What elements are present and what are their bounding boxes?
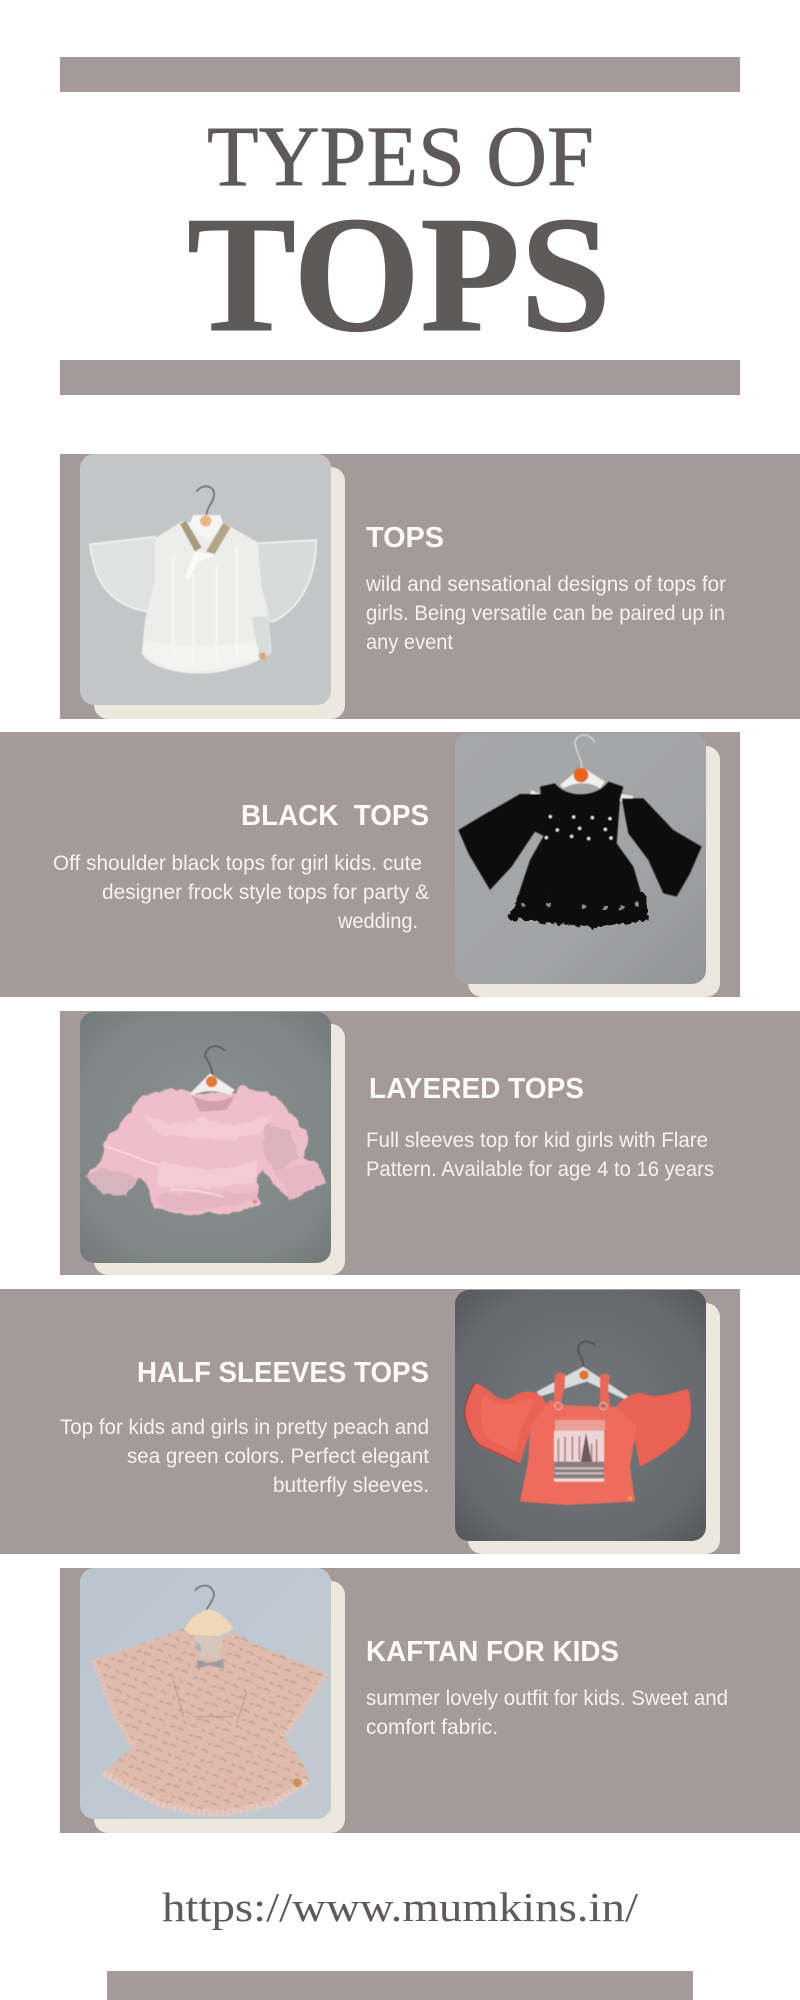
description bbox=[53, 852, 429, 933]
description: Top for kids and girls in pretty peach and bbox=[60, 1416, 429, 1439]
panel: kaftan for kids bbox=[60, 1568, 800, 1833]
header bbox=[60, 57, 740, 395]
photo: floral kaftan bbox=[80, 1568, 331, 1819]
card backing bbox=[94, 1581, 345, 1833]
heading: TOPS bbox=[366, 522, 444, 554]
panel: tops bbox=[60, 454, 800, 719]
description bbox=[366, 1687, 728, 1739]
panel: half sleeves tops bbox=[0, 1289, 740, 1554]
description: butterfly sleeves. bbox=[273, 1474, 429, 1497]
description: Pattern. Available for age 4 to 16 years bbox=[366, 1158, 714, 1181]
lace hem bbox=[509, 893, 648, 929]
heading: KAFTAN FOR KIDS bbox=[366, 1636, 619, 1668]
description: designer frock style tops for party & bbox=[102, 881, 429, 904]
top header bar bbox=[60, 57, 740, 92]
description: sea green colors. Perfect elegant bbox=[127, 1445, 429, 1468]
footer bar bbox=[107, 1971, 693, 2000]
description: comfort fabric. bbox=[366, 1716, 498, 1739]
description: Full sleeves top for kid girls with Flare bbox=[366, 1129, 708, 1152]
description bbox=[366, 1129, 714, 1181]
card backing bbox=[94, 467, 345, 719]
card backing bbox=[468, 1303, 720, 1554]
description: girls. Being versatile can be paired up in bbox=[366, 602, 725, 625]
title line: types of: TYPES OF bbox=[207, 108, 594, 204]
description: wild and sensational designs of tops for bbox=[365, 573, 726, 596]
heading: BLACK TOPS bbox=[241, 800, 429, 832]
heading: LAYERED TOPS bbox=[369, 1073, 584, 1105]
card backing bbox=[94, 1024, 345, 1275]
description bbox=[60, 1416, 429, 1497]
heading: HALF SLEEVES TOPS bbox=[137, 1357, 429, 1389]
photo: pink layered top bbox=[80, 1012, 331, 1263]
description: any event bbox=[366, 631, 453, 654]
description: Off shoulder black tops for girl kids. cute bbox=[53, 852, 422, 875]
photo: white top bbox=[80, 454, 331, 705]
photo: coral top bbox=[455, 1290, 706, 1541]
title line: tops: TOPS bbox=[187, 182, 611, 366]
description bbox=[365, 573, 726, 654]
card backing bbox=[468, 746, 720, 997]
description: wedding. bbox=[337, 910, 418, 933]
photo: black top bbox=[455, 733, 706, 984]
bottom header bar bbox=[60, 360, 740, 395]
panel: black tops bbox=[0, 732, 740, 997]
website url: https://www.mumkins.in/ bbox=[162, 1884, 639, 1930]
panel: layered tops bbox=[60, 1011, 800, 1275]
description: summer lovely outfit for kids. Sweet and bbox=[366, 1687, 728, 1710]
